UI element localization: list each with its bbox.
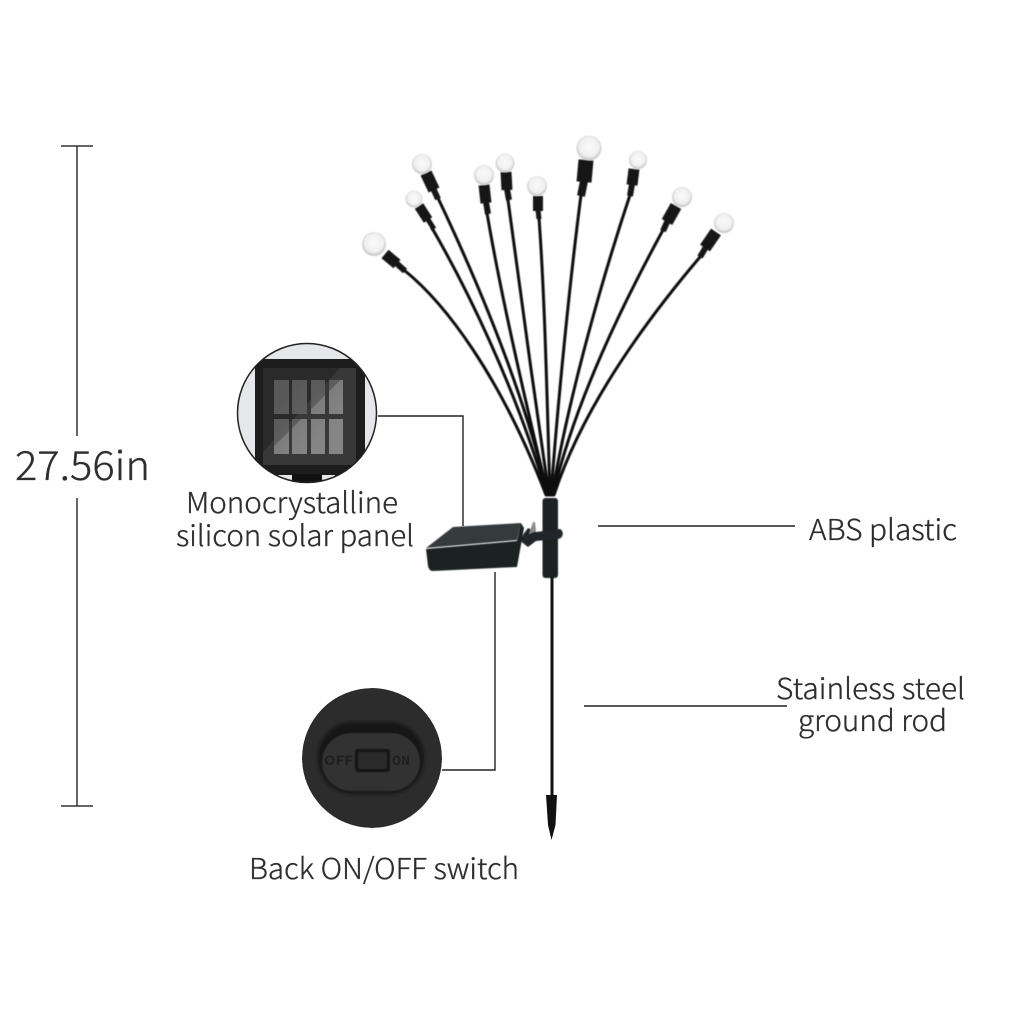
ground rod (546, 577, 557, 840)
switch ON label: ON (392, 750, 410, 769)
solar panel detail circle (237, 343, 377, 484)
firefly lamp stems (404, 195, 700, 495)
leader lines (378, 416, 795, 770)
label: monocrystalline silicon solar panel: silicon solar panel (176, 513, 414, 555)
switch OFF label: OFF (324, 750, 353, 769)
switch detail circle (302, 688, 442, 828)
solar circle outline (238, 344, 376, 482)
height dimension line (61, 146, 93, 806)
label: back on/off switch: Back ON/OFF switch (249, 846, 519, 888)
ABS plastic stem sleeve with clamp (519, 498, 563, 578)
solar cells (274, 380, 343, 454)
label: stainless steel ground rod: ground rod (798, 698, 947, 740)
solar panel unit (426, 523, 524, 571)
label: monocrystalline silicon solar panel: Monocrystalline (186, 480, 398, 522)
label: stainless steel ground rod (776, 666, 965, 740)
bulb holders (385, 160, 716, 271)
label: monocrystalline silicon solar panel (176, 480, 414, 555)
bulbs (362, 136, 734, 256)
label: ABS plastic: ABS plastic (809, 507, 957, 549)
label: stainless steel ground rod: Stainless steel (776, 666, 965, 708)
height label: 27.56in (15, 434, 150, 492)
